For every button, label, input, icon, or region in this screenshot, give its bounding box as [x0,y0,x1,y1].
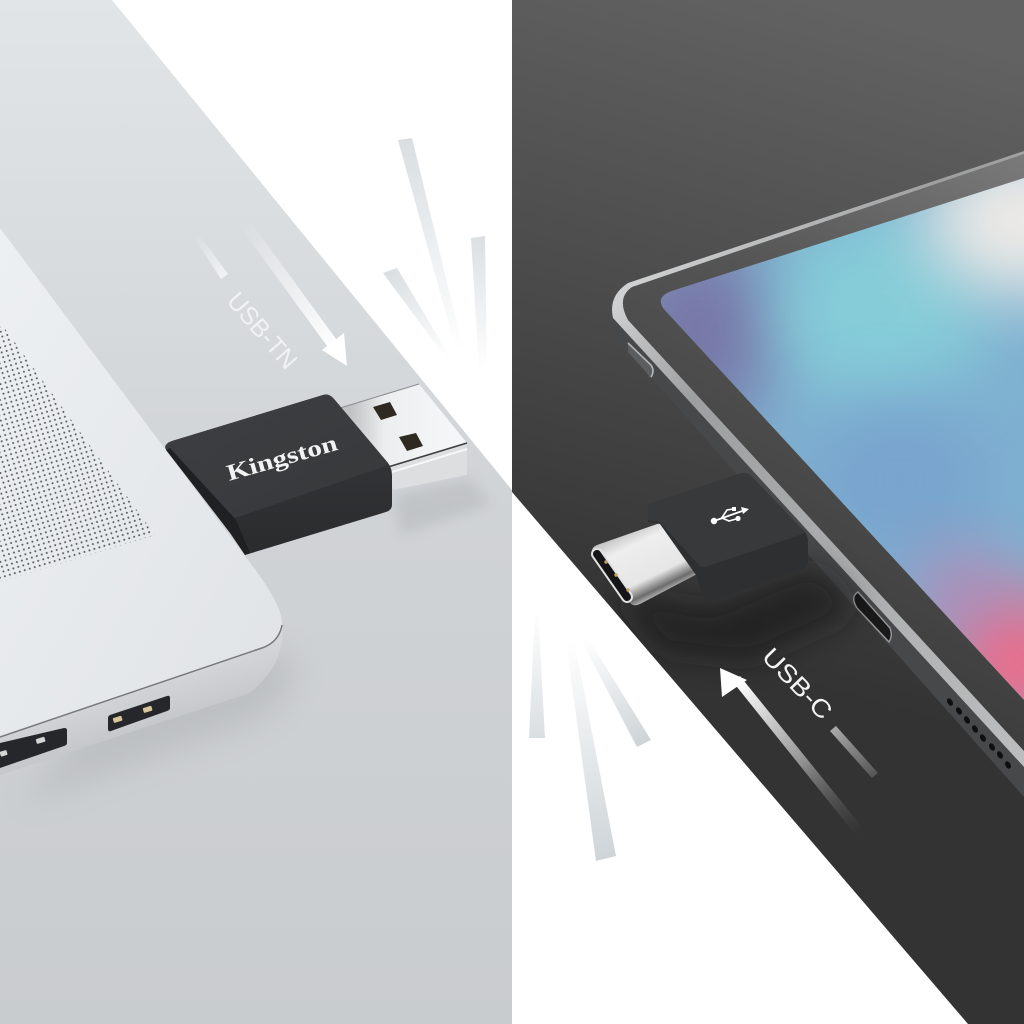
tablet speaker grille [946,697,1012,770]
USB-C adapter shadow [612,565,860,660]
panel: dark USB-C side [512,0,1024,1024]
tablet bezel [622,151,1024,751]
USB-C adapter [592,473,808,605]
USB-A connector shadow [396,480,484,531]
metal plug [592,523,701,605]
tablet screen [660,178,1024,700]
icon: USB trident [711,507,749,524]
laptop USB port large [0,728,67,768]
arrow: insert upward [720,668,866,838]
dongle body [165,394,392,555]
panel: light USB-A side [0,0,512,1024]
arrow: insert downward [238,217,347,366]
tablet side button [628,343,653,378]
speaker dot grid [0,322,155,582]
dash mark [193,233,228,279]
tablet metal rim [612,151,1024,767]
label: USB-C: USB-C [756,643,838,725]
laptop [0,228,295,805]
dash mark [830,726,878,778]
tablet USB-C port [854,592,891,642]
dongle body [648,473,808,602]
USB-A adapter [165,384,467,555]
label: USB-TN: USB-TN [221,287,303,375]
metal plug [340,384,467,490]
logo: Kingston: Kingston [224,430,340,486]
laptop USB port small [108,696,170,731]
burst rays: left [383,138,487,372]
burst rays: right [529,608,651,861]
tablet side wall [612,312,1024,797]
tablet [612,145,1024,797]
